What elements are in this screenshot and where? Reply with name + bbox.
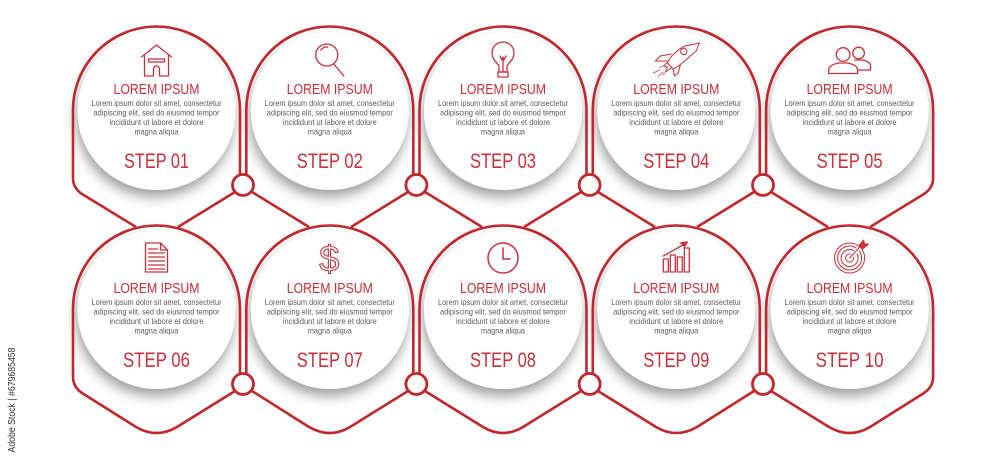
description (611, 98, 742, 136)
description (92, 297, 222, 336)
description: Lorem ipsum dolor sit amet, consectetur (785, 98, 915, 108)
step label: STEP 01 (124, 150, 189, 173)
heading: LOREM IPSUM (807, 81, 893, 98)
step 04 (597, 32, 755, 190)
heading: LOREM IPSUM (807, 280, 893, 297)
step 08 (424, 231, 582, 389)
description: magna aliqua (481, 126, 525, 136)
step label: STEP 04 (643, 150, 710, 173)
description: Lorem ipsum dolor sit amet, consectetur (92, 98, 222, 108)
description: incididunt ut labore et dolore (110, 316, 204, 326)
description: adipiscing elit, sed do eiusmod tempor (267, 306, 393, 316)
description: Lorem ipsum dolor sit amet, consectetur (611, 297, 742, 307)
description: incididunt ut labore et dolore (110, 117, 204, 127)
description: Lorem ipsum dolor sit amet, consectetur (438, 98, 568, 108)
description: magna aliqua (481, 326, 525, 336)
heading: LOREM IPSUM (460, 81, 546, 98)
outline: bottom row arches and hexagon bases (73, 226, 933, 433)
icon: dollar: $ (319, 238, 339, 279)
description (438, 297, 568, 336)
heading: LOREM IPSUM (114, 280, 200, 297)
description: incididunt ut labore et dolore (283, 316, 377, 326)
icon: light bulb (492, 42, 514, 77)
description: Lorem ipsum dolor sit amet, consectetur (265, 98, 395, 108)
description (265, 98, 395, 136)
stock id caption: Adobe Stock | #679685458 (6, 347, 18, 452)
description: magna aliqua (134, 126, 179, 136)
step 09 (597, 231, 755, 389)
icon: bar chart with arrow (663, 242, 689, 272)
description: adipiscing elit, sed do eiusmod tempor (267, 108, 393, 118)
description: incididunt ut labore et dolore (456, 316, 550, 326)
step 05 (771, 32, 929, 190)
description (92, 98, 222, 136)
description: magna aliqua (134, 326, 179, 336)
step label: STEP 08 (470, 349, 536, 372)
description: magna aliqua (654, 326, 699, 336)
description (785, 98, 915, 136)
step label: STEP 05 (817, 150, 883, 173)
description: adipiscing elit, sed do eiusmod tempor (440, 108, 566, 118)
description: incididunt ut labore et dolore (629, 117, 724, 127)
step label: STEP 02 (297, 150, 363, 173)
step label: STEP 10 (816, 349, 884, 372)
description: incididunt ut labore et dolore (629, 316, 724, 326)
step label: STEP 03 (470, 150, 536, 173)
description: adipiscing elit, sed do eiusmod tempor (613, 108, 740, 118)
description: Lorem ipsum dolor sit amet, consectetur (92, 297, 222, 307)
description (438, 98, 568, 136)
description: magna aliqua (654, 126, 699, 136)
description: magna aliqua (828, 126, 872, 136)
description: Lorem ipsum dolor sit amet, consectetur (611, 98, 742, 108)
icon: rocket (653, 43, 699, 76)
icon: magnifier (316, 44, 344, 76)
description: Lorem ipsum dolor sit amet, consectetur (438, 297, 568, 307)
description: magna aliqua (828, 326, 872, 336)
description (611, 297, 742, 336)
step label: STEP 09 (643, 349, 709, 372)
connector nodes (232, 174, 774, 394)
step label: STEP 06 (123, 349, 190, 372)
description: adipiscing elit, sed do eiusmod tempor (613, 306, 740, 316)
heading: LOREM IPSUM (633, 81, 719, 98)
description (785, 297, 915, 336)
heading: LOREM IPSUM (460, 280, 546, 297)
description: incididunt ut labore et dolore (456, 117, 550, 127)
description: adipiscing elit, sed do eiusmod tempor (94, 306, 220, 316)
description (265, 297, 395, 336)
icon: clock (488, 243, 518, 273)
step 03 (424, 32, 582, 190)
heading: LOREM IPSUM (287, 280, 373, 297)
step 02 (251, 32, 409, 190)
step 01 (78, 32, 236, 190)
description: incididunt ut labore et dolore (803, 117, 897, 127)
description: incididunt ut labore et dolore (283, 117, 377, 127)
description: incididunt ut labore et dolore (803, 316, 897, 326)
outline: top row arches and connectors (73, 27, 933, 227)
step 10 (771, 231, 929, 389)
description: adipiscing elit, sed do eiusmod tempor (787, 306, 913, 316)
heading: LOREM IPSUM (114, 81, 200, 98)
icon: document (146, 243, 168, 272)
icon: people (829, 47, 871, 74)
description: magna aliqua (308, 326, 352, 336)
step 07 (251, 231, 409, 389)
icon: target (835, 240, 869, 273)
description: Lorem ipsum dolor sit amet, consectetur (785, 297, 915, 307)
description: Lorem ipsum dolor sit amet, consectetur (265, 297, 395, 307)
description: magna aliqua (308, 126, 352, 136)
heading: LOREM IPSUM (633, 280, 719, 297)
step label: STEP 07 (297, 349, 363, 372)
step 06 (78, 231, 236, 389)
icon: house (142, 45, 172, 76)
heading: LOREM IPSUM (287, 81, 373, 98)
description: adipiscing elit, sed do eiusmod tempor (94, 108, 220, 118)
description: adipiscing elit, sed do eiusmod tempor (787, 108, 913, 118)
description: adipiscing elit, sed do eiusmod tempor (440, 306, 566, 316)
